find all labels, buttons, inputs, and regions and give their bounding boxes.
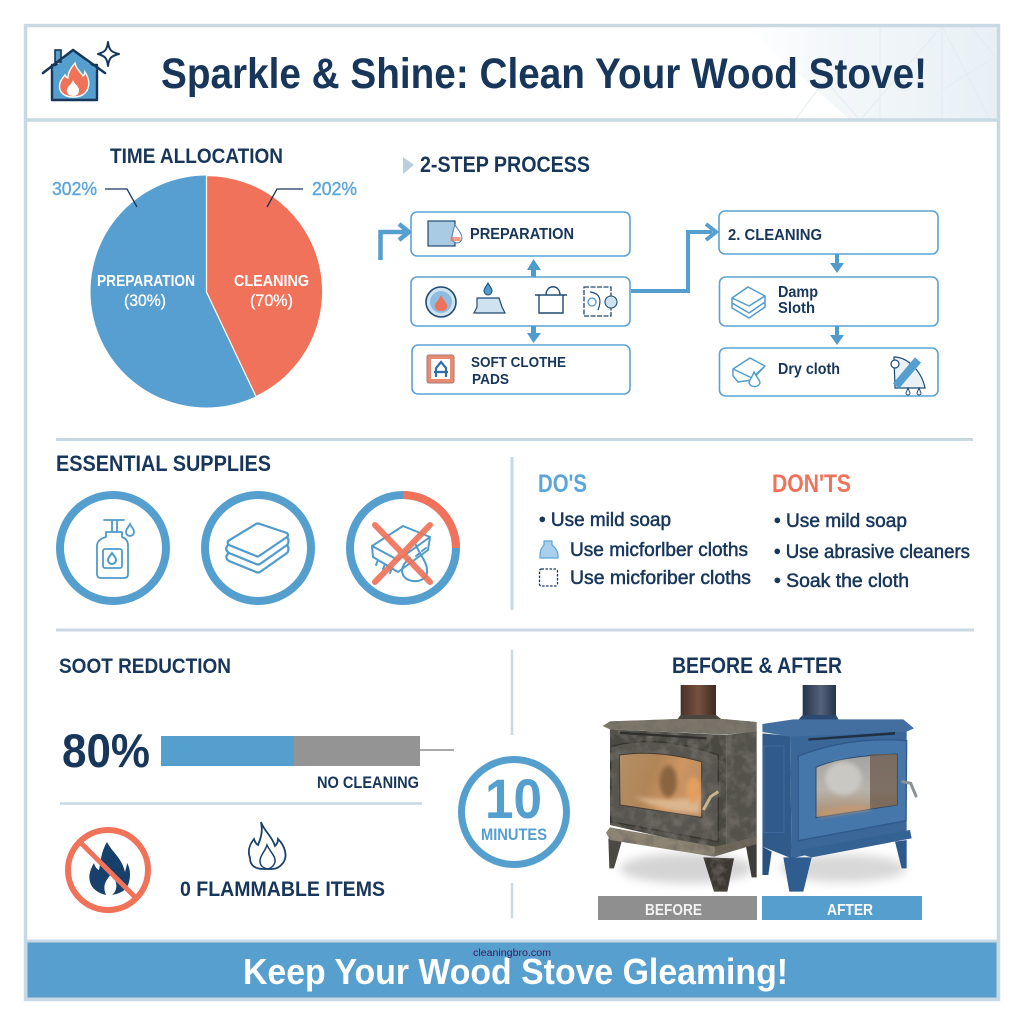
label: 302%	[52, 179, 137, 207]
panel: essential supplies	[56, 451, 456, 601]
label: 0 flammable items: 0 FLAMMABLE ITEMS	[180, 877, 385, 901]
heading: essential supplies: ESSENTIAL SUPPLIES	[56, 451, 271, 476]
heading: 2-step process: 2-STEP PROCESS	[420, 152, 590, 177]
panel: 2-step process	[380, 152, 938, 396]
text: preparation: PREPARATION	[470, 226, 574, 243]
icon: stacked cloths in ring	[205, 495, 311, 601]
label bar: before: BEFORE	[645, 902, 702, 919]
label: preparation share	[97, 273, 195, 310]
box: damp sloth	[720, 277, 938, 326]
divider: vertical supplies / do's	[510, 457, 514, 610]
box: 2. cleaning: 2. CLEANING	[728, 227, 822, 244]
arrow: up to preparation	[527, 259, 541, 277]
header band	[26, 26, 998, 120]
icon: crossed-out iron	[891, 357, 925, 395]
icon: folded cloths	[732, 287, 765, 318]
icon: sponge with drop	[733, 358, 765, 387]
text: soft clothe pads: PADS	[472, 371, 509, 388]
list item: soak the cloth: • Soak the cloth	[774, 571, 909, 592]
footer slogan: Keep Your Wood Stove Gleaming!	[243, 951, 788, 992]
heading: do's: DO'S	[538, 470, 587, 498]
heading: don'ts: DON'TS	[772, 470, 851, 498]
icon: stove panel	[428, 221, 462, 246]
title: Sparkle & Shine: Clean Your Wood Stove!	[161, 50, 927, 98]
label bar: after	[762, 896, 922, 920]
footer banner	[26, 941, 998, 999]
label: preparation share: PREPARATION	[97, 273, 195, 290]
illustration: dirty stove	[603, 685, 757, 892]
text: damp sloth	[778, 284, 818, 317]
bar chart: soot reduction	[161, 736, 454, 766]
label: 302%: 302%	[52, 179, 97, 199]
panel: soot reduction	[59, 655, 454, 910]
box: soft clothe pads	[412, 345, 630, 394]
label: 202%: 202%	[312, 179, 357, 199]
callout: 10 minutes: MINUTES	[481, 825, 547, 844]
divider: vertical upper	[511, 650, 513, 735]
divider: below top section	[56, 438, 973, 441]
text: soft clothe pads: SOFT CLOTHE	[471, 354, 566, 371]
stat: 80%: 80%	[62, 724, 150, 777]
text: soft clothe pads	[471, 354, 566, 388]
icon: soap bottle in ring	[60, 495, 166, 601]
panel: don'ts	[772, 470, 970, 592]
text: dry cloth: Dry cloth	[778, 361, 840, 378]
box: preparation	[411, 212, 630, 256]
box: 2. cleaning	[719, 211, 938, 254]
list item: abrasive cleaners: • Use abrasive cleaners	[774, 542, 970, 563]
illustration: clean stove	[762, 685, 916, 892]
pie chart	[90, 175, 323, 408]
icon: crossed-out sponge in ring	[350, 495, 456, 601]
label: preparation share: (30%)	[124, 291, 166, 310]
arrow: cleaning to damp cloth	[830, 254, 844, 273]
arrow: into preparation	[380, 224, 409, 260]
icon: no flame	[68, 830, 148, 910]
label: cleaning share	[234, 273, 309, 310]
arrow: down to pads	[527, 326, 541, 343]
divider: vertical lower	[511, 883, 513, 918]
arrow: damp to dry cloth	[830, 326, 844, 345]
icon: burner with drop	[474, 283, 505, 313]
label: cleaning share: (70%)	[250, 291, 293, 310]
label bar: after: AFTER	[827, 902, 873, 919]
box: tool icons	[411, 277, 630, 326]
arrow: connector to cleaning	[631, 224, 716, 291]
callout: 10 minutes	[462, 760, 566, 864]
label: 202%	[267, 179, 357, 207]
list item: mild soap: • Use mild soap	[539, 510, 671, 531]
heading: time allocation: TIME ALLOCATION	[110, 145, 283, 168]
label: no cleaning: NO CLEANING	[317, 774, 419, 792]
list item: mild soap: • Use mild soap	[774, 511, 907, 532]
box: dry cloth	[720, 348, 938, 396]
panel: do's	[538, 470, 751, 589]
list item: microfiber cloths with spray icon: Use micforlber cloths	[570, 540, 748, 561]
text: damp sloth: Sloth	[778, 300, 815, 317]
icon: flame outline	[249, 822, 285, 869]
icon: pad	[427, 355, 454, 383]
label bar: before	[598, 896, 757, 920]
label: cleaning share: CLEANING	[234, 273, 309, 290]
panel: before and after	[598, 653, 922, 920]
list item: microfiber cloths with square icon: Use micforiber cloths	[570, 568, 751, 589]
icon: pot	[535, 287, 567, 313]
icon: circuit cloth	[584, 287, 617, 316]
heading: before and after: BEFORE & AFTER	[672, 653, 842, 678]
icon: house with flame and sparkle	[43, 42, 119, 100]
callout: 10 minutes: 10	[485, 767, 542, 830]
watermark url: cleaningbro.com	[473, 948, 551, 959]
divider: above bottom section	[56, 628, 974, 632]
icon: stove door flame	[426, 287, 456, 317]
heading: soot reduction: SOOT REDUCTION	[59, 655, 231, 678]
text: damp sloth: Damp	[778, 284, 818, 301]
panel: time allocation pie chart	[52, 145, 357, 408]
